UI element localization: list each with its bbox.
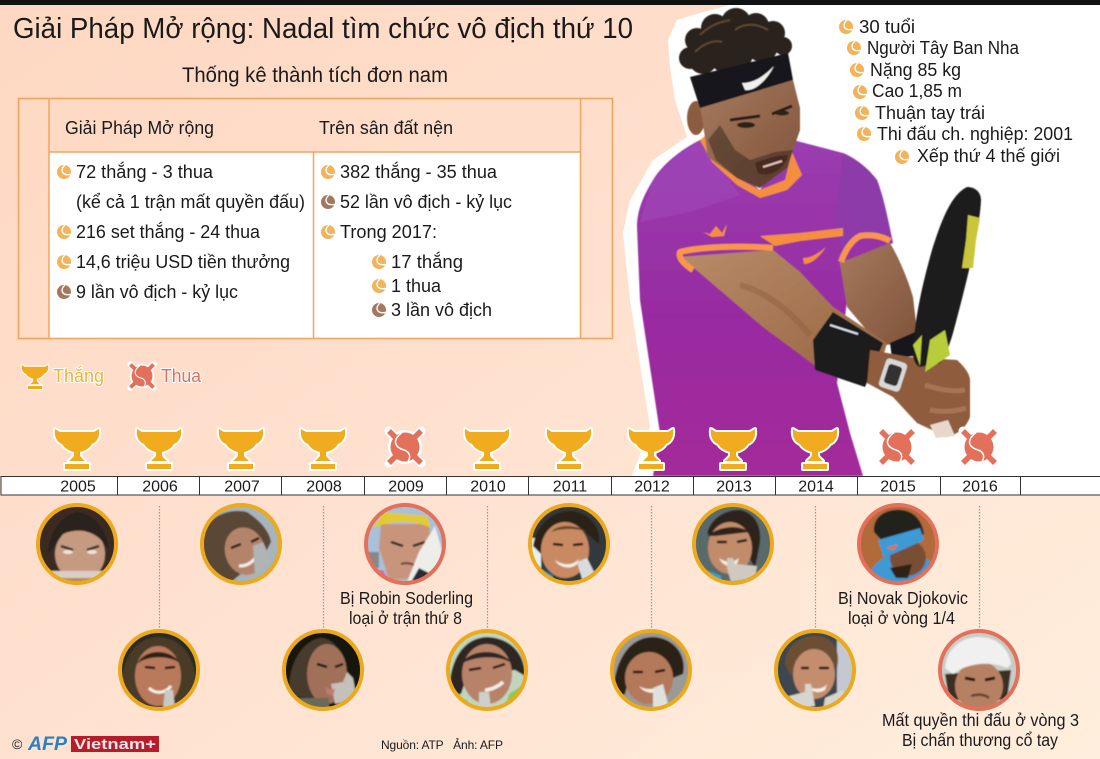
photo 2006: [119, 630, 199, 710]
collar: [700, 136, 802, 198]
player illustration: Nadal backhand: [637, 8, 981, 476]
2013 win: [711, 429, 755, 469]
nationality: Người Tây Ban Nha: [867, 37, 1020, 58]
timeline trophies row: [55, 429, 996, 469]
world ranking: Xếp thứ 4 thế giới: [917, 145, 1060, 166]
photo 2014: [775, 630, 855, 710]
legend: win: [22, 365, 104, 389]
photo 2011: [529, 504, 609, 584]
hair: [679, 8, 792, 74]
timeline year bar: 2006: [142, 478, 178, 496]
headband swoosh: [742, 66, 774, 90]
caption: 2009 loss: loại ở trận thứ 8: [349, 608, 462, 628]
caption: 2016 withdrawal: Bị chấn thương cổ tay: [902, 730, 1058, 750]
French Open stats: (kể cả 1 trận mất quyền đấu): [76, 191, 305, 212]
timeline year bar: 2010: [470, 478, 506, 496]
legend: win: Thắng: [53, 365, 104, 386]
2005 win: [55, 429, 99, 469]
front arm: [678, 250, 887, 385]
player profile list: [839, 16, 1073, 166]
French Open stats: [57, 161, 305, 302]
caption: 2015 loss: loại ở vòng 1/4: [848, 608, 955, 628]
watch: [878, 357, 908, 393]
photo 2009: [365, 504, 445, 584]
French Open stats: 72 thắng - 3 thua: [76, 161, 214, 182]
clay court stats: 52 lần vô địch - kỷ lục: [340, 191, 512, 212]
caption: 2015 loss: [838, 588, 968, 628]
neck and face: [700, 80, 800, 188]
white area behind player and profile: [623, 5, 1100, 476]
shirt stripes and logos: [703, 224, 843, 264]
timeline year bar: 2014: [798, 478, 834, 496]
headband: [690, 53, 793, 108]
timeline year bar: 2015: [880, 478, 916, 496]
timeline year bar: 2008: [306, 478, 342, 496]
2016 loss: [962, 430, 996, 464]
career start: Thi đấu ch. nghiệp: 2001: [877, 123, 1073, 144]
2012 win: [629, 429, 673, 469]
2009 loss: [388, 430, 422, 464]
ear: [687, 101, 705, 135]
clay court stats: 382 thắng - 35 thua: [340, 161, 498, 182]
photo 2008: [283, 630, 363, 710]
timeline year bar: 2011: [553, 478, 587, 496]
caption: 2016 withdrawal: Mất quyền thi đấu ở vòng 3: [882, 710, 1079, 730]
photo 2016: [939, 630, 1019, 711]
footer logo: AFP: [27, 734, 67, 755]
photo 2010: [447, 630, 527, 710]
handedness: Thuận tay trái: [875, 102, 985, 123]
2008 win: [301, 429, 345, 469]
timeline year bar: 2009: [388, 478, 424, 496]
column header: clay courts: Trên sân đất nện: [319, 117, 453, 138]
photo 2005: [37, 504, 117, 584]
photo 2007: [201, 504, 281, 584]
legend: loss: Thua: [161, 365, 202, 386]
2011 win: [547, 429, 591, 469]
height: Cao 1,85 m: [872, 80, 962, 101]
clay court stats: 1 thua: [391, 275, 442, 296]
timeline year bar: 2005: [60, 478, 96, 496]
legend: loss: [130, 364, 202, 388]
caption: 2016 withdrawal: [882, 710, 1079, 750]
2014 win: [793, 429, 837, 469]
timeline year bar: 2013: [716, 478, 752, 496]
clay court stats: [321, 161, 512, 320]
photo 2015: [858, 504, 938, 584]
hands: [867, 350, 970, 437]
footer logo: [12, 734, 159, 755]
timeline year bar: 2012: [634, 478, 670, 496]
weight: Nặng 85 kg: [870, 59, 961, 80]
footer logo: ©: [12, 736, 23, 752]
timeline year bar: [1, 476, 1100, 496]
French Open stats: 216 set thắng - 24 thua: [76, 221, 261, 242]
title: Giải Pháp Mở rộng: Nadal tìm chức vô địch thứ 10: [13, 13, 633, 45]
panel: statistics table: [18, 98, 612, 338]
clay court stats: 3 lần vô địch: [391, 299, 492, 320]
clay court stats: Trong 2017:: [340, 221, 437, 242]
wristband: [813, 312, 883, 387]
caption: 2015 loss: Bị Novak Djokovic: [838, 588, 968, 608]
timeline year bar: 2016: [962, 478, 998, 496]
caption: 2009 loss: [340, 588, 473, 628]
shirt: [637, 140, 893, 476]
photo 2012: [611, 630, 691, 710]
sleeve trims: [680, 235, 890, 270]
2007 win: [219, 429, 263, 469]
footer source credit: Nguồn: ATP Ảnh: AFP: [381, 737, 503, 752]
clay court stats: 17 thắng: [391, 251, 463, 272]
racket: [913, 187, 981, 372]
French Open stats: 9 lần vô địch - kỷ lục: [76, 281, 238, 302]
2006 win: [137, 429, 181, 469]
timeline year bar: 2007: [224, 478, 260, 496]
age: 30 tuổi: [859, 16, 915, 37]
2010 win: [465, 429, 509, 469]
2015 loss: [880, 430, 914, 464]
legend: [22, 364, 202, 389]
photo 2013: [693, 504, 773, 584]
column header: French Open: Giải Pháp Mở rộng: [65, 117, 214, 138]
top black rule: [0, 0, 1100, 5]
caption: 2009 loss: Bị Robin Soderling: [340, 588, 473, 608]
French Open stats: 14,6 triệu USD tiền thưởng: [76, 251, 290, 272]
footer logo: Vietnam+: [74, 736, 156, 753]
table heading: Thống kê thành tích đơn nam: [182, 64, 448, 87]
racket arm right: [840, 243, 918, 346]
